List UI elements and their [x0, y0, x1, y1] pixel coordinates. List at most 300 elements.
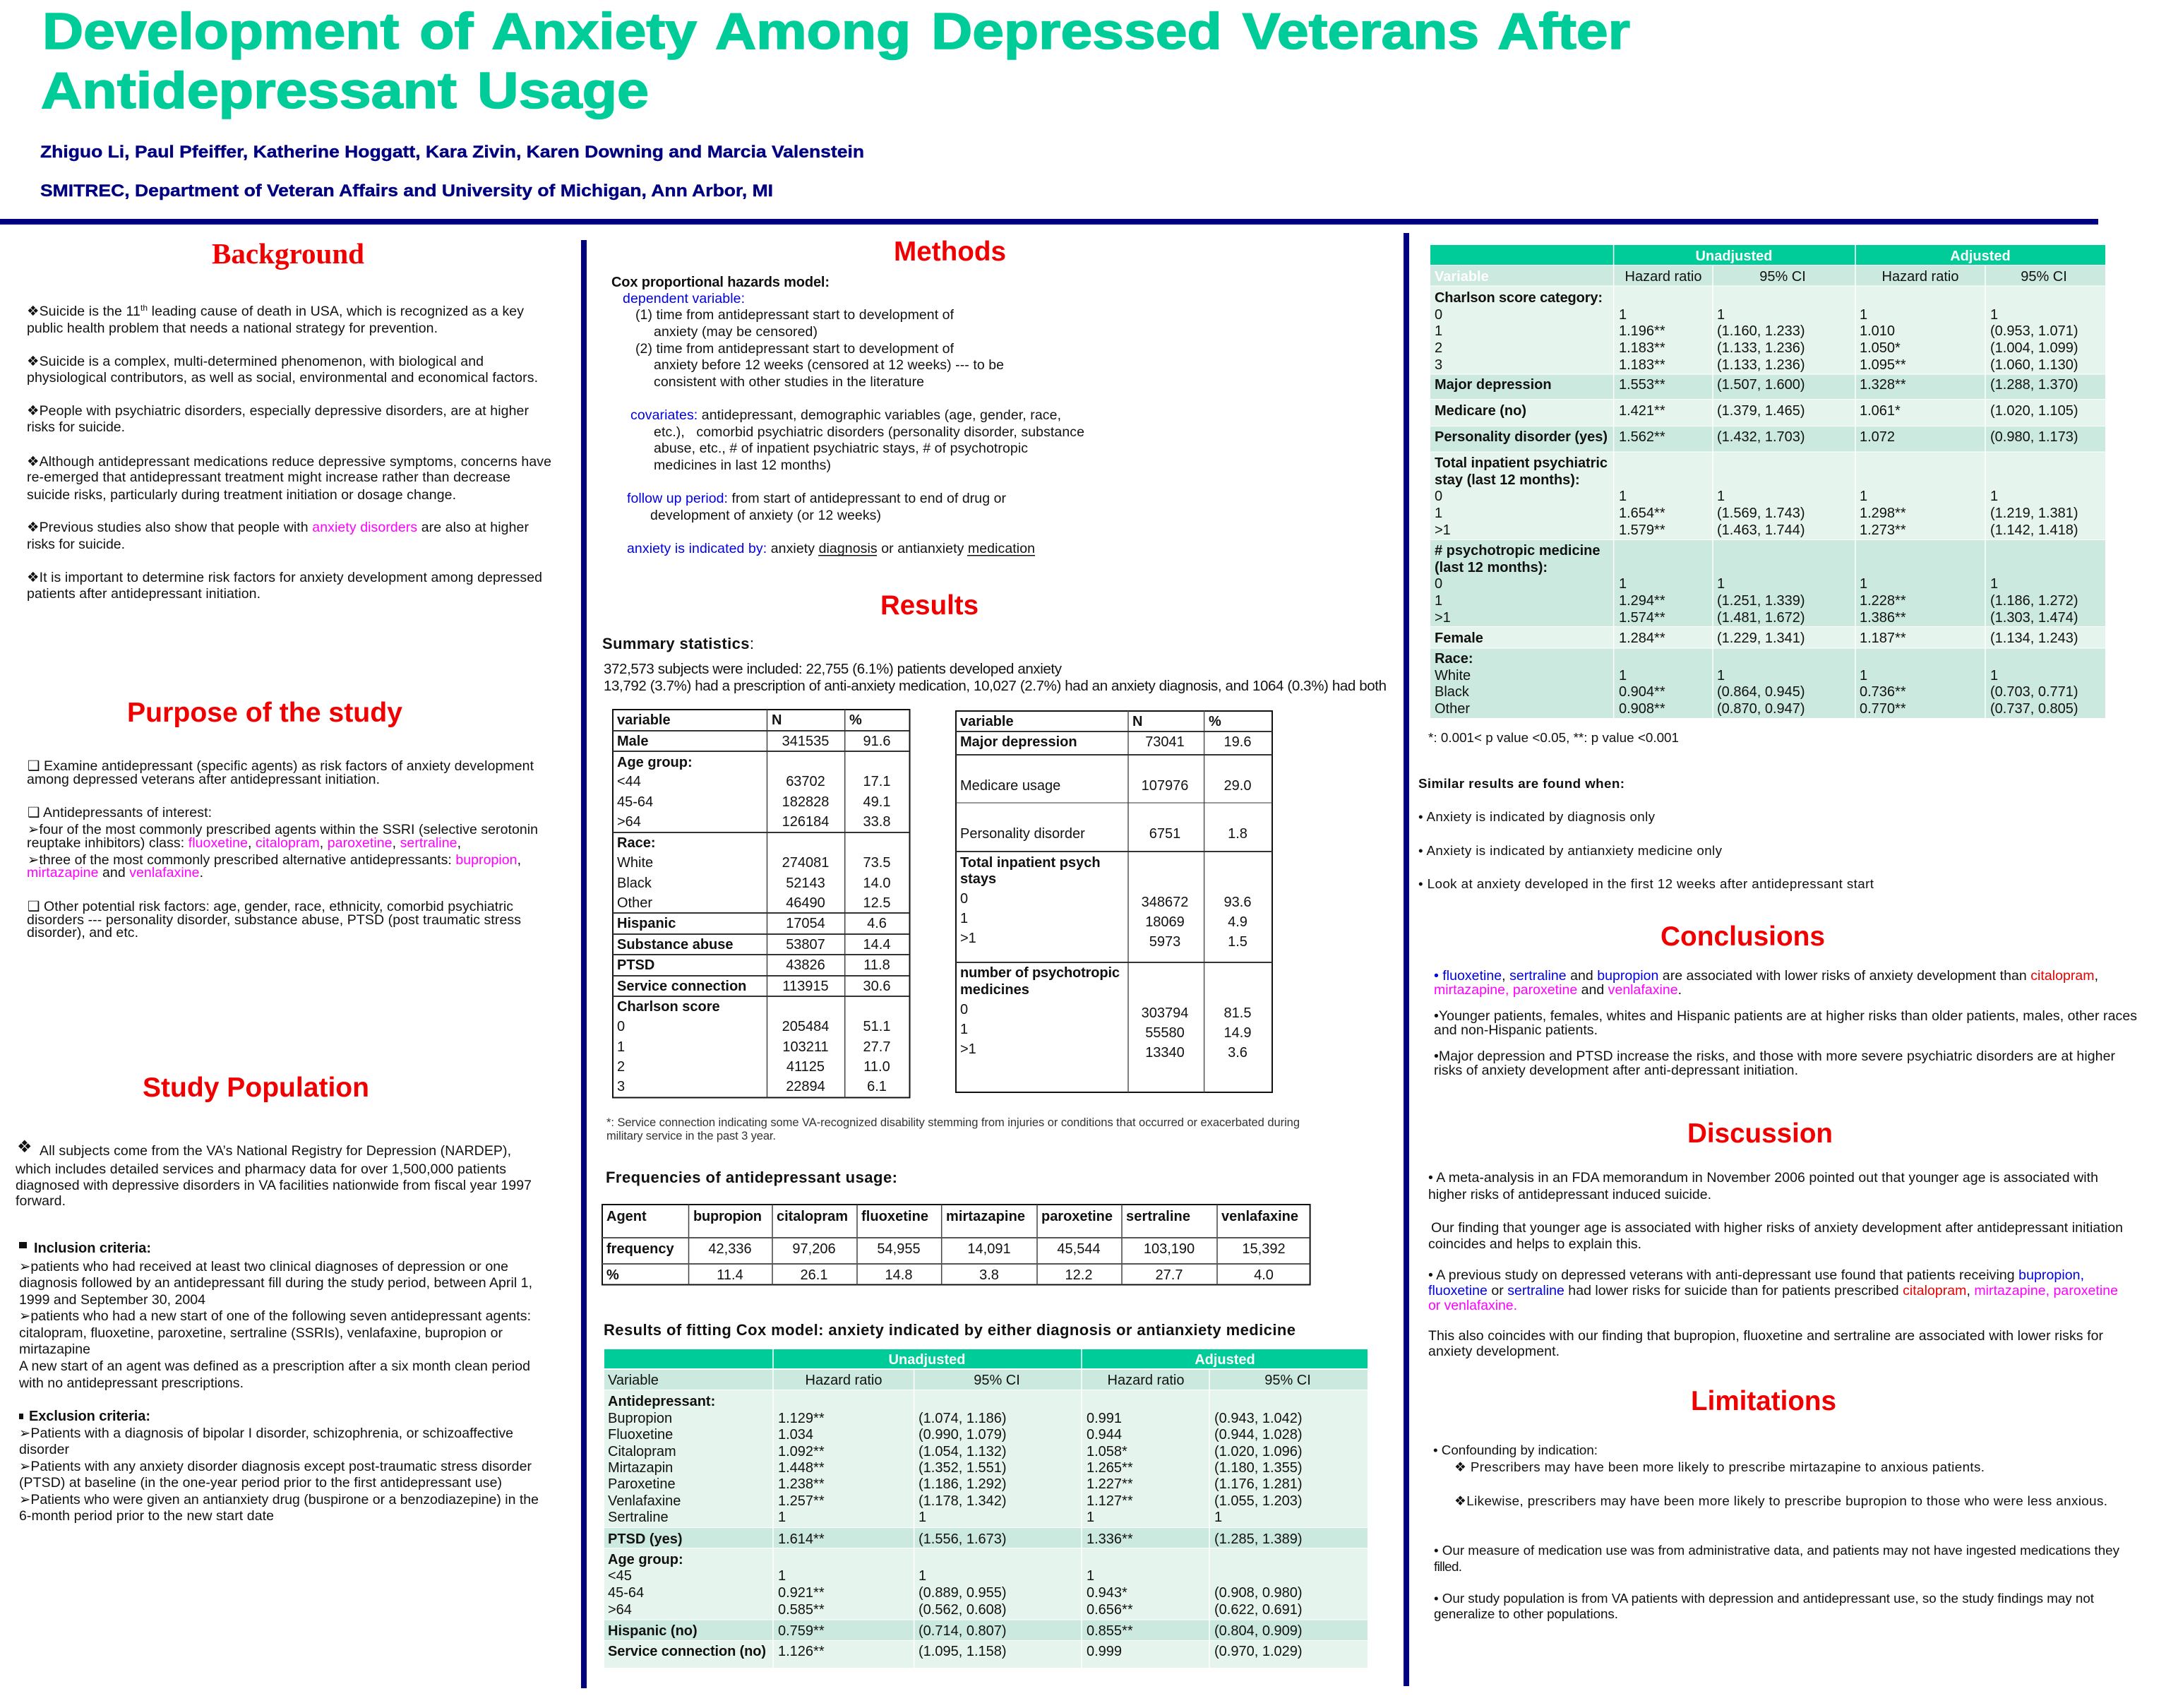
table: summary statistics right: 29.0 [1224, 778, 1251, 794]
table: cox model part 1: 0.999 [1087, 1644, 1122, 1659]
table: cox model part 1: Service connection (no) [608, 1644, 766, 1659]
text block: summary statistics: 372,573 subjects were included: 22,755 (6.1%) patients developed anxiety [604, 661, 1063, 677]
table: cox model part 2: 0 [1435, 307, 1442, 323]
text block: conclusions: and non-Hispanic patients. [1434, 1022, 1598, 1038]
table: cox model part 2: 1.061* [1860, 403, 1901, 419]
table: summary statistics right: 6751 [1149, 826, 1180, 842]
table: antidepressant frequencies: Agent [606, 1209, 647, 1224]
heading: purpose: Purpose of the study [127, 698, 402, 728]
table: summary statistics left: 17054 [786, 916, 825, 931]
table: cox model part 2: 1 [1619, 307, 1627, 323]
table: cox model part 2: 0.908** [1619, 701, 1665, 717]
title: Antidepressant Usage [41, 63, 649, 119]
table: cox model part 1: 1.092** [778, 1444, 825, 1459]
text block: conclusions: mirtazapine, paroxetine and venlafaxine. [1434, 982, 1682, 998]
table: antidepressant frequencies: % [606, 1267, 619, 1283]
table: antidepressant frequencies: 54,955 [877, 1241, 921, 1257]
table: cox model part 2: (last 12 months): [1435, 560, 1548, 575]
table: cox model part 1: (1.178, 1.342) [919, 1493, 1007, 1509]
table: cox model part 1: (1.074, 1.186) [919, 1411, 1007, 1426]
table: cox model part 2 [1430, 245, 2105, 718]
table: summary statistics left: White [617, 855, 653, 871]
table: antidepressant frequencies: 27.7 [1156, 1267, 1183, 1283]
table: summary statistics right: stays [960, 871, 996, 887]
table: cox model part 1: (1.054, 1.132) [919, 1444, 1007, 1459]
table: summary statistics left: 4.6 [867, 916, 887, 931]
table: summary statistics left: 46490 [786, 895, 825, 911]
table: cox model part 2: 2 [1435, 340, 1442, 356]
table: cox model part 2: 1 [1717, 668, 1725, 683]
table: antidepressant frequencies: citalopram [777, 1209, 848, 1224]
table: antidepressant frequencies: 103,190 [1144, 1241, 1195, 1257]
table: cox model part 1: 95% CI [974, 1373, 1020, 1388]
table: summary statistics left: 17.1 [863, 774, 890, 789]
table: summary statistics right: Personality disorder [960, 826, 1085, 842]
text block: inclusion criteria: diagnosis followed by an antidepressant fill during the study period, between April 1, [19, 1275, 532, 1291]
table: cox model part 1: 0.855** [1087, 1623, 1133, 1639]
table: cox model part 2: (1.288, 1.370) [1990, 377, 2078, 393]
text block: purpose items: among depressed veterans after antidepressant initiation. [27, 772, 380, 787]
table: cox model part 1: 1 [919, 1568, 926, 1584]
text block: conclusions: risks of anxiety development after anti-depressant initiation. [1434, 1063, 1798, 1078]
table: cox model part 2: 1 [1435, 323, 1442, 339]
table: summary statistics left: 73.5 [863, 855, 890, 871]
text block: discussion: • A meta-analysis in an FDA memorandum in November 2006 pointed out that younger age is associated with [1428, 1170, 2098, 1186]
text block: exclusion criteria: ➢Patients with a diagnosis of bipolar I disorder, schizophrenia, or schizoaffective [19, 1426, 513, 1441]
text block: discussion: or venlafaxine. [1428, 1298, 1517, 1313]
table: cox model part 2: 1 [1619, 668, 1627, 683]
panel: discussion [1428, 1118, 2123, 1359]
text block: registry description: which includes detailed services and pharmacy data for over 1,500,000 patients [15, 1161, 506, 1177]
heading: study population: Study Population [143, 1073, 369, 1103]
table: summary statistics right: 0 [960, 891, 968, 907]
table: cox model part 1: (1.285, 1.389) [1214, 1531, 1303, 1547]
table: cox model part 1: Hispanic (no) [608, 1623, 698, 1639]
panel: limitations [1433, 1386, 2120, 1621]
text block: methods description: abuse, etc., # of inpatient psychiatric stays, # of psychotropic [654, 441, 1028, 456]
table: cox model part 2: 1 [1990, 668, 1998, 683]
text block: registry description: diagnosed with depressive disorders in VA facilities nationwide from fiscal year 1997 [16, 1178, 532, 1193]
table: cox model part 2: 1.183** [1619, 340, 1665, 356]
text block: background bullets: ❖Previous studies also show that people with anxiety disorders are also at higher [27, 520, 529, 535]
table: cox model part 2: White [1435, 668, 1471, 683]
text block: summary statistics: 13,792 (3.7%) had a prescription of anti-anxiety medication, 10,027 (2.7%) had an anxiety diagnosis, and 1064 (0.3%) had both [604, 678, 1387, 694]
text block: limitations: ❖Likewise, prescribers may have been more likely to prescribe bupropion to those who were less anxious. [1454, 1493, 2107, 1508]
table: cox model part 1: 1 [1214, 1510, 1222, 1525]
panel: conclusions [1434, 921, 2137, 1078]
table: antidepressant frequencies: 14.8 [885, 1267, 912, 1283]
table: cox model part 2: (1.004, 1.099) [1990, 340, 2078, 356]
text block: purpose items: ❑ Other potential risk factors: age, gender, race, ethnicity, comorbid psychiatric [28, 899, 513, 914]
text block: similar results: • Look at anxiety developed in the first 12 weeks after antidepressant start [1418, 876, 1874, 891]
table: cox model part 1: 1.448** [778, 1460, 825, 1476]
table: antidepressant frequencies: 14,091 [967, 1241, 1011, 1257]
heading: frequencies of antidepressant usage: Frequencies of antidepressant usage: [606, 1169, 897, 1186]
text block: inclusion criteria: A new start of an agent was defined as a prescription after a six month clean period [19, 1358, 530, 1374]
text block: conclusions [1434, 968, 2137, 1078]
text block: methods description: consistent with other studies in the literature [654, 374, 924, 390]
text block: discussion: Our finding that younger age is associated with higher risks of anxiety development after antidepressant initiation [1431, 1220, 2123, 1236]
table: summary statistics left: 341535 [782, 734, 829, 749]
table: cox model part 2: 1.228** [1860, 593, 1906, 609]
text block: background bullets: suicide risks, particularly during treatment initiation or dosage change. [27, 487, 456, 503]
table: cox model part 2: (1.481, 1.672) [1717, 610, 1805, 626]
table: cox model part 1: (0.908, 0.980) [1214, 1585, 1303, 1601]
table: cox model part 2: 1.654** [1619, 506, 1665, 521]
text block: discussion: • A previous study on depressed veterans with anti-depressant use found that patients receiving bupropion, [1428, 1267, 2084, 1283]
text block: methods description: dependent variable: [623, 291, 745, 306]
text block: exclusion criteria: ➢Patients who were given an antianxiety drug (buspirone or a benzodiazepine) in the [19, 1492, 539, 1507]
table: cox model part 1: (0.804, 0.909) [1214, 1623, 1303, 1639]
table: cox model part 1: 1.127** [1087, 1493, 1133, 1509]
text block: conclusions: •Major depression and PTSD increase the risks, and those with more severe psychiatric disorders are at higher [1434, 1049, 2115, 1064]
table: cox model part 2: 1.553** [1619, 377, 1665, 393]
panel: background [27, 237, 551, 602]
table: cox model part 2: 1.574** [1619, 610, 1665, 626]
table: antidepressant frequencies: frequency [606, 1241, 674, 1257]
table: summary statistics left: 3 [617, 1079, 625, 1094]
table: cox model part 2: (1.229, 1.341) [1717, 631, 1805, 646]
table: summary statistics right: variable [960, 714, 1014, 729]
table: cox model part 2: (1.303, 1.474) [1990, 610, 2078, 626]
table: summary statistics left: 51.1 [863, 1019, 890, 1034]
table: summary statistics right: 93.6 [1224, 895, 1251, 910]
table: cox model part 1: (0.889, 0.955) [919, 1585, 1007, 1601]
table: antidepressant frequencies: 11.4 [717, 1267, 743, 1283]
table: antidepressant frequencies: paroxetine [1041, 1209, 1113, 1224]
table: summary statistics left: 2 [617, 1059, 625, 1075]
table: cox model part 1: 1.126** [778, 1644, 825, 1659]
table: cox model part 2: Personality disorder (yes) [1435, 429, 1608, 445]
table: cox model part 2: (0.737, 0.805) [1990, 701, 2078, 717]
table: cox model part 2: 0.770** [1860, 701, 1906, 717]
table: summary statistics right: number of psychotropic [960, 965, 1120, 981]
table: cox model part 2: 1.072 [1860, 429, 1895, 445]
table: cox model part 1: Mirtazapin [608, 1460, 673, 1476]
table: antidepressant frequencies: 12.2 [1065, 1267, 1092, 1283]
table: summary statistics left: 91.6 [863, 734, 890, 749]
table: cox model part 2: 1.284** [1619, 631, 1665, 646]
table: summary statistics right: 3.6 [1228, 1045, 1247, 1061]
table: antidepressant frequencies: bupropion [693, 1209, 762, 1224]
panel: study population [15, 1073, 539, 1524]
table: summary statistics left: 11.0 [863, 1059, 890, 1075]
text block: exclusion criteria [19, 1409, 539, 1524]
text block: methods description: Cox proportional hazards model: [611, 275, 830, 290]
table: cox model part 1: 1 [778, 1568, 786, 1584]
table: cox model part 2: 1 [1860, 489, 1867, 504]
table: cox model part 2: (1.134, 1.243) [1990, 631, 2078, 646]
footnote: service connection: *: Service connection indicating some VA-recognized disability stemming from injuries or conditions that occurred or exacerbated during [606, 1116, 1300, 1129]
table: summary statistics right: 19.6 [1224, 734, 1251, 750]
table: cox model part 2: Unadjusted [1696, 249, 1772, 264]
text block: similar results: Similar results are found when: [1418, 776, 1624, 791]
table: summary statistics right: 1 [960, 911, 968, 926]
table: cox model part 1: 1.336** [1087, 1531, 1133, 1547]
table: cox model part 2: (1.507, 1.600) [1717, 377, 1805, 393]
table: cox model part 1: Variable [608, 1373, 659, 1388]
text block: background bullets: ❖It is important to determine risk factors for anxiety development among depressed [27, 570, 542, 585]
table: cox model part 1: 45-64 [608, 1585, 644, 1601]
heading: results of fitting cox model: Results of fitting Cox model: anxiety indicated by either diagnosis or antianxiety medicine [604, 1321, 1296, 1339]
text block: inclusion criteria: mirtazapine [19, 1342, 90, 1357]
footnote: service connection [606, 1116, 1300, 1142]
text block: exclusion criteria: 6-month period prior to the new start date [19, 1508, 274, 1524]
text block: background bullets: risks for suicide. [27, 537, 125, 552]
table: summary statistics left: 103211 [782, 1039, 829, 1055]
table: summary statistics right: 55580 [1145, 1025, 1185, 1041]
table: cox model part 1: Sertraline [608, 1510, 669, 1525]
text block: similar results: • Anxiety is indicated by antianxiety medicine only [1418, 843, 1723, 858]
table: cox model part 1: 1.238** [778, 1476, 825, 1492]
table: summary statistics left: Other [617, 895, 652, 911]
text block: inclusion criteria: ➢patients who had a new start of one of the following seven antidepressant agents: [19, 1308, 531, 1324]
table: cox model part 2: 1.298** [1860, 506, 1906, 521]
text block: purpose items: ❑ Examine antidepressant (specific agents) as risk factors of anxiety development [28, 758, 534, 774]
table: cox model part 2: 1.273** [1860, 522, 1906, 538]
text block: limitations: • Our measure of medication use was from administrative data, and patients may not have ingested medications they [1434, 1543, 2120, 1558]
table: cox model part 2: 1 [1717, 489, 1725, 504]
text block: limitations: • Our study population is from VA patients with depression and antidepressant use, so the study findings may not [1434, 1591, 2095, 1606]
table: cox model part 2: (0.864, 0.945) [1717, 684, 1805, 700]
text block: limitations: filled. [1434, 1559, 1462, 1574]
text block: methods description: (1) time from antidepressant start to development of [635, 307, 955, 323]
table: cox model part 2: 1 [1990, 307, 1998, 323]
table: cox model part 2: (1.219, 1.381) [1990, 506, 2078, 521]
text block: conclusions: • fluoxetine, sertraline and bupropion are associated with lower risks of anxiety development than citalopram, [1434, 968, 2098, 984]
table: cox model part 1: Age group: [608, 1552, 683, 1567]
table: cox model part 2: Other [1435, 701, 1470, 717]
table: summary statistics right: >1 [960, 931, 976, 946]
table: summary statistics right: 348672 [1142, 895, 1188, 910]
table: cox model part 2: 1 [1990, 489, 1998, 504]
table: summary statistics right: 81.5 [1224, 1005, 1251, 1021]
table: antidepressant frequencies [602, 1205, 1310, 1285]
table: summary statistics right: Total inpatient psych [960, 855, 1101, 871]
table: summary statistics left: <44 [617, 774, 641, 789]
table: summary statistics right: Medicare usage [960, 778, 1060, 794]
text block: conclusions: •Younger patients, females, whites and Hispanic patients are at higher risks than older patients, males, other races [1434, 1008, 2137, 1024]
text block: purpose items [27, 758, 538, 940]
table: cox model part 1: 95% CI [1264, 1373, 1311, 1388]
heading: limitations: Limitations [1691, 1386, 1836, 1416]
table: summary statistics left: 41125 [786, 1059, 825, 1075]
table: cox model part 1: Adjusted [1195, 1352, 1255, 1368]
table: cox model part 2: 1 [1860, 668, 1867, 683]
table: summary statistics left: 14.4 [863, 937, 890, 952]
table: cox model part 1: 0.585** [778, 1602, 825, 1618]
footnote: p values: *: 0.001< p value <0.05, **: p value <0.001 [1428, 730, 1679, 745]
table: summary statistics left: 11.8 [863, 957, 890, 973]
heading: methods: Methods [894, 237, 1006, 267]
table: cox model part 2: (1.569, 1.743) [1717, 506, 1805, 521]
text block: registry description: forward. [16, 1193, 66, 1209]
text block: background bullets: leading cause of death in USA, which is recognized as a key [148, 304, 524, 319]
table: summary statistics right: % [1209, 714, 1221, 729]
table: summary statistics right: 18069 [1145, 914, 1185, 930]
text block: methods description: (2) time from antidepressant start to development of [635, 341, 955, 357]
text block: inclusion criteria: 1999 and September 30, 2004 [19, 1292, 205, 1308]
table: cox model part 2: (1.133, 1.236) [1717, 357, 1805, 373]
table: cox model part 2: Race: [1435, 651, 1473, 667]
table: cox model part 1: 1.265** [1087, 1460, 1133, 1476]
panel: results summary [602, 590, 1387, 694]
table: summary statistics left: 1 [617, 1039, 625, 1055]
table: antidepressant frequencies: 45,544 [1057, 1241, 1101, 1257]
text block: inclusion criteria: citalopram, fluoxetine, paroxetine, sertraline (SSRIs), venlafaxine, bupropion or [19, 1325, 503, 1341]
table: summary statistics left [613, 710, 909, 1097]
text block: background bullets [27, 303, 551, 602]
table: cox model part 1: 0.921** [778, 1585, 825, 1601]
text block: methods description [611, 275, 1084, 556]
table: cox model part 2: 1.196** [1619, 323, 1665, 339]
table: summary statistics left: 43826 [786, 957, 825, 973]
table: summary statistics left: Male [617, 734, 648, 749]
table: cox model part 2: 95% CI [1759, 269, 1806, 285]
table: cox model part 1: Unadjusted [889, 1352, 965, 1368]
table: summary statistics right: medicines [960, 982, 1029, 998]
table: cox model part 1: (0.943, 1.042) [1214, 1411, 1303, 1426]
text block: purpose items: ❑ Antidepressants of interest: [28, 805, 212, 820]
table: cox model part 1: 1.257** [778, 1493, 825, 1509]
table: cox model part 2: (1.379, 1.465) [1717, 403, 1805, 419]
text block: discussion: fluoxetine or sertraline had lower risks for suicide than for patients prescribed citalopram, mirtazapine, paroxetine [1428, 1283, 2118, 1298]
table: summary statistics left: PTSD [617, 957, 654, 973]
table: cox model part 1: 1 [1087, 1568, 1094, 1584]
text block: background bullets: public health problem that needs a national strategy for prevention. [27, 321, 438, 336]
table: cox model part 2: 0.904** [1619, 684, 1665, 700]
text block: purpose items: disorders --- personality disorder, substance abuse, PTSD (post traumatic stress [27, 912, 521, 928]
text block: methods description: medicines in last 12 months) [654, 458, 831, 473]
heading: results: Results [880, 590, 979, 621]
table: cox model part 2: (0.953, 1.071) [1990, 323, 2078, 339]
table: cox model part 2: Medicare (no) [1435, 403, 1526, 419]
table: summary statistics right: 1 [960, 1022, 968, 1037]
authors: Zhiguo Li, Paul Pfeiffer, Katherine Hoggatt, Kara Zivin, Karen Downing and Marcia Valenstein [40, 143, 864, 162]
heading: discussion: Discussion [1687, 1118, 1833, 1149]
table: cox model part 1: 0.759** [778, 1623, 825, 1639]
table: summary statistics left: Black [617, 876, 652, 891]
table: summary statistics left: Substance abuse [617, 937, 734, 952]
text block: discussion: This also coincides with our finding that bupropion, fluoxetine and sertraline are associated with lower risks for [1428, 1328, 2104, 1344]
table: antidepressant frequencies: venlafaxine [1221, 1209, 1298, 1224]
table: cox model part 2: (1.020, 1.105) [1990, 403, 2078, 419]
table: cox model part 1: <45 [608, 1568, 632, 1584]
table: cox model part 1: Citalopram [608, 1444, 676, 1459]
table: cox model part 2: (1.251, 1.339) [1717, 593, 1805, 609]
table: cox model part 1: (1.176, 1.281) [1214, 1476, 1303, 1492]
text block: registry description: All subjects come from the VA’s National Registry for Depression (NARDEP), [40, 1143, 511, 1159]
table: cox model part 1: (1.055, 1.203) [1214, 1493, 1303, 1509]
text block: inclusion criteria: Inclusion criteria: [34, 1241, 151, 1256]
table: cox model part 2: 1 [1717, 576, 1725, 592]
text block: purpose items: reuptake inhibitors) class: fluoxetine, citalopram, paroxetine, sertraline, [27, 835, 461, 851]
text block: limitations [1433, 1443, 2120, 1621]
table: summary statistics left: 12.5 [863, 895, 890, 911]
table: cox model part 2: Adjusted [1950, 249, 2011, 264]
table: summary statistics right: 1.8 [1228, 826, 1247, 842]
table: cox model part 2: 1.579** [1619, 522, 1665, 538]
table: summary statistics left: 0 [617, 1019, 625, 1034]
table: cox model part 1: 0.991 [1087, 1411, 1122, 1426]
text block: background bullets: risks for suicide. [27, 419, 125, 435]
table: cox model part 2: (0.980, 1.173) [1990, 429, 2078, 445]
table: cox model part 2: 1 [1619, 576, 1627, 592]
table: antidepressant frequencies: fluoxetine [861, 1209, 928, 1224]
table: summary statistics left: Hispanic [617, 916, 676, 931]
text block: methods description: etc.), comorbid psychiatric disorders (personality disorder, substance [654, 424, 1084, 440]
table: cox model part 2: (1.463, 1.744) [1717, 522, 1805, 538]
table: cox model part 1: Hazard ratio [1108, 1373, 1184, 1388]
text block: exclusion criteria: Exclusion criteria: [29, 1409, 150, 1424]
table: antidepressant frequencies: 97,206 [792, 1241, 836, 1257]
table: summary statistics right [956, 711, 1272, 1092]
footnote: service connection: military service in the past 3 year. [606, 1130, 776, 1142]
affiliation: SMITREC, Department of Veteran Affairs and University of Michigan, Ann Arbor, MI [40, 181, 773, 201]
table: cox model part 1: 1 [778, 1510, 786, 1525]
table: summary statistics left: N [772, 712, 782, 728]
table: summary statistics left: 14.0 [863, 876, 890, 891]
table: summary statistics right: 5973 [1149, 934, 1180, 950]
table: cox model part 1: Hazard ratio [806, 1373, 882, 1388]
table: cox model part 1: (0.990, 1.079) [919, 1427, 1007, 1443]
text block: purpose items: disorder), and etc. [27, 925, 138, 940]
heading: conclusions: Conclusions [1661, 921, 1825, 952]
table: cox model part 1: 1 [919, 1510, 926, 1525]
table: cox model part 1: (0.562, 0.608) [919, 1602, 1007, 1618]
table: cox model part 2: stay (last 12 months): [1435, 472, 1580, 488]
text block: inclusion criteria: ➢patients who had received at least two clinical diagnoses of depression or one [19, 1259, 508, 1274]
table: cox model part 2: Female [1435, 631, 1483, 646]
table: cox model part 2: Total inpatient psychiatric [1435, 455, 1608, 471]
table: antidepressant frequencies: 4.0 [1254, 1267, 1274, 1283]
table: cox model part 1: 0.656** [1087, 1602, 1133, 1618]
table: cox model part 2: 0 [1435, 576, 1442, 592]
table: cox model part 2: 0 [1435, 489, 1442, 504]
table: summary statistics right: 14.9 [1224, 1025, 1251, 1041]
table: summary statistics left: Race: [617, 835, 655, 851]
table: cox model part 2: (0.703, 0.771) [1990, 684, 2078, 700]
table: summary statistics left: % [849, 712, 862, 728]
text block: purpose items: mirtazapine and venlafaxine. [27, 865, 203, 880]
table: cox model part 1: (1.352, 1.551) [919, 1460, 1007, 1476]
table: antidepressant frequencies: sertraline [1126, 1209, 1190, 1224]
table: summary statistics left: 53807 [786, 937, 825, 952]
table: summary statistics right: 107976 [1142, 778, 1188, 794]
table: cox model part 2: 1.328** [1860, 377, 1906, 393]
text block: methods description: anxiety (may be censored) [654, 324, 818, 340]
text block: registry description: ❖ [17, 1137, 32, 1157]
table: summary statistics right: 13340 [1145, 1045, 1185, 1061]
text block: discussion: higher risks of antidepressant induced suicide. [1428, 1187, 1711, 1202]
table: cox model part 1: PTSD (yes) [608, 1531, 683, 1547]
table: cox model part 1: (0.944, 1.028) [1214, 1427, 1303, 1443]
table: antidepressant frequencies: 3.8 [979, 1267, 999, 1283]
table: cox model part 1: 1 [1087, 1510, 1094, 1525]
title [41, 4, 1630, 119]
text block: background bullets: re-emerged that antidepressant treatment might increase rather than decrease [27, 470, 510, 485]
table: cox model part 2: 1 [1860, 307, 1867, 323]
text block: discussion [1428, 1170, 2123, 1359]
table: cox model part 1: 1.614** [778, 1531, 825, 1547]
table: cox model part 1: 1.058* [1087, 1444, 1127, 1459]
table: cox model part 2: 3 [1435, 357, 1442, 373]
table: cox model part 2: (1.133, 1.236) [1717, 340, 1805, 356]
text block: discussion: anxiety development. [1428, 1344, 1560, 1359]
table: cox model part 2: >1 [1435, 522, 1451, 538]
table: summary statistics left: 22894 [786, 1079, 825, 1094]
table: summary statistics left: 113915 [782, 979, 829, 994]
